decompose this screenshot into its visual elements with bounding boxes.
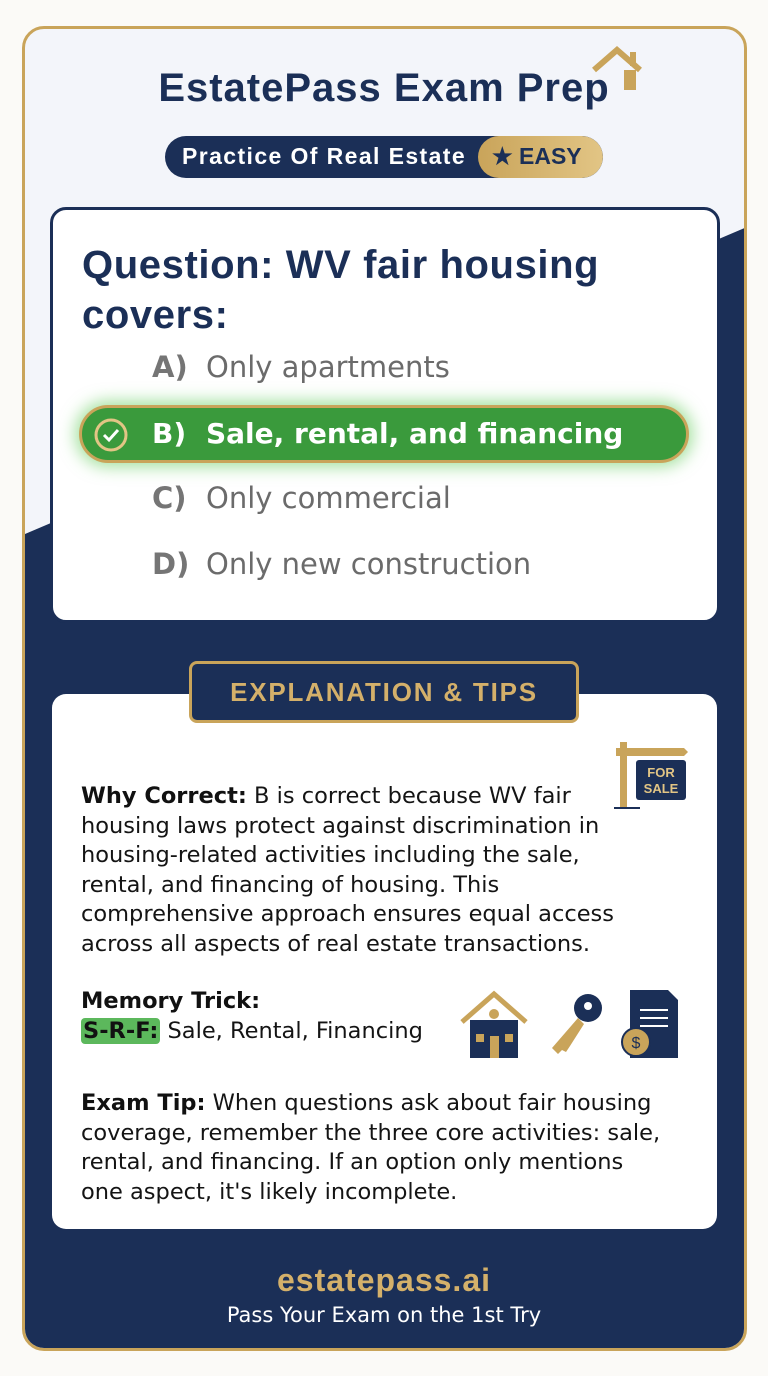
text: memory trick: S-R-F: Sale, Rental, Financing (83, 1018, 423, 1044)
text: why correct: Why Correct: B is correct because WV fair (81, 783, 571, 809)
icons: house key document (460, 990, 678, 1058)
option D: Only new construction (206, 547, 531, 581)
option B correct: B) (152, 417, 186, 450)
icon: for sale sign (614, 742, 688, 809)
text: exam tip: rental, and financing. If an option only mentions (81, 1149, 623, 1175)
text: memory trick: Memory Trick: (81, 988, 260, 1014)
text: exam tip: one aspect, it's likely incomplete. (81, 1178, 457, 1204)
category pill (165, 136, 603, 178)
question text (82, 243, 599, 337)
option D: D) (152, 547, 189, 581)
text: exam tip: coverage, remember the three core activities: sale, (81, 1120, 660, 1146)
option A: Only apartments (206, 350, 450, 384)
difficulty badge (478, 136, 603, 178)
category pill: Practice Of Real Estate (182, 143, 466, 169)
option A: A) (152, 350, 188, 384)
option C: C) (152, 481, 187, 515)
text: why correct: housing laws protect against discrimination in (81, 812, 599, 838)
option B correct (79, 405, 689, 463)
footer brand: estatepass.ai (277, 1262, 491, 1298)
icon: gold house (592, 46, 642, 90)
icon: for sale sign: SALE (644, 781, 679, 796)
panel: question (50, 207, 720, 623)
text: why correct: housing-related activities including the sale, (81, 842, 580, 868)
explanation banner (189, 661, 579, 723)
difficulty badge: ★ EASY (492, 143, 582, 169)
text: why correct: across all aspects of real estate transactions. (81, 930, 590, 956)
icon: for sale sign: FOR (647, 765, 675, 780)
question text: Question: WV fair housing (82, 243, 599, 287)
text: exam tip: Exam Tip: When questions ask about fair housing (81, 1090, 651, 1116)
icons: house key document: $ (632, 1035, 641, 1052)
footer tagline: Pass Your Exam on the 1st Try (227, 1303, 541, 1327)
text: why correct: comprehensive approach ensures equal access (81, 901, 614, 927)
icon: check (94, 418, 128, 452)
title: EstatePass Exam Prep (158, 66, 610, 110)
question text: covers: (82, 293, 229, 337)
option B correct: Sale, rental, and financing (206, 417, 623, 450)
text: exam tip (81, 1090, 660, 1204)
option C: Only commercial (206, 481, 451, 515)
text: memory trick (81, 988, 423, 1044)
panel: explanation (52, 694, 717, 1229)
explanation banner: EXPLANATION & TIPS (230, 677, 538, 707)
text: why correct: rental, and financing of housing. This (81, 872, 499, 898)
text: why correct (81, 783, 614, 956)
